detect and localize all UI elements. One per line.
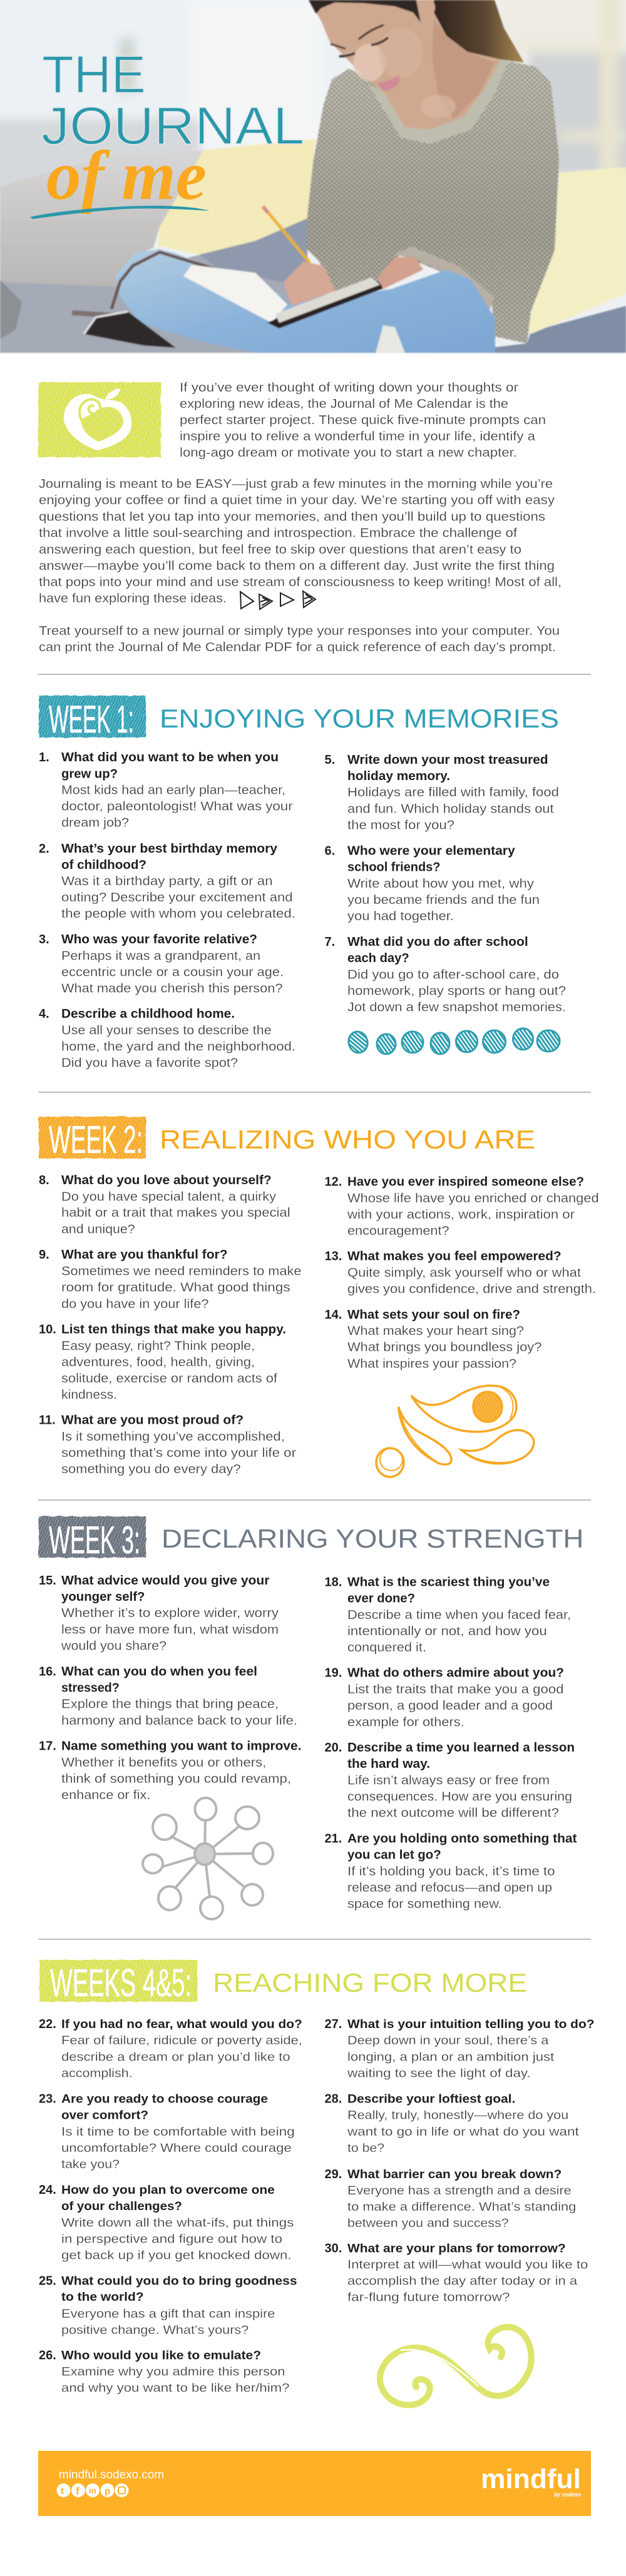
mindful logo: by sodexo [554,2492,581,2498]
question 14: What sets your soul on fire? [347,1308,520,1322]
question 23: take you? [61,2158,120,2171]
question 3: 3. [39,933,49,946]
question 6 [324,844,540,923]
icon: row of teal scribble balls [346,1028,560,1055]
question 11: Is it something you’ve accomplished, [61,1430,285,1444]
question 30 [324,2241,588,2304]
question 20 [324,1741,575,1820]
intro paragraph 1: perfect starter project. These quick five-minute prompts can [180,413,546,427]
question 17: think of something you could revamp, [61,1772,291,1786]
question 5: the most for you? [347,818,454,832]
question 10: adventures, food, health, giving, [61,1356,255,1369]
intro paragraph 1: long-ago dream or motivate you to start a new chapter. [180,446,517,460]
question 3: Perhaps it was a grandparent, an [61,950,260,963]
heading: week 1 [39,696,559,741]
question 24: 24. [39,2183,56,2197]
question 2: of childhood? [61,858,146,872]
jeans [116,249,495,353]
question 6: Write about how you met, why [347,877,534,891]
sweater [305,59,559,343]
question 1: doctor, paleontologist! What was your [61,800,293,814]
question 24: Write down all the what-ifs, put things [61,2216,294,2229]
question 19: person, a good leader and a good [347,1699,553,1713]
title: THE [42,45,146,104]
question 11: 11. [39,1414,56,1427]
question 8: 8. [39,1174,49,1187]
title: JOURNAL [41,96,304,155]
question 21: space for something new. [347,1897,502,1911]
question 2 [39,842,295,921]
question 20: consequences. How are you ensuring [347,1790,572,1803]
question 15: younger self? [61,1590,145,1604]
question 5: Write down your most treasured [347,753,548,767]
question 4: Use all your senses to describe the [61,1023,272,1037]
question 7: 7. [324,935,335,949]
question 15: What advice would you give your [61,1574,270,1588]
question 20: the next outcome will be different? [347,1806,559,1820]
icon: orange paisley doodle [376,1386,534,1477]
question 13 [324,1250,596,1296]
question 18: 18. [324,1575,342,1589]
hair [434,0,524,63]
question 2: the people with whom you celebrated. [61,907,295,921]
question 26: and why you want to be like her/him? [61,2381,290,2395]
heading: week 2: REALIZING WHO YOU ARE [160,1125,535,1154]
intro paragraph 1: exploring new ideas, the Journal of Me Calendar is the [180,397,508,411]
question 25: Everyone has a gift that can inspire [61,2307,275,2321]
question 30: 30. [324,2241,342,2255]
question 3 [39,933,284,996]
question 5: and fun. Which holiday stands out [347,802,554,816]
intro paragraph 3 [39,624,560,654]
question 10 [39,1323,286,1402]
question 30: far-flung future tomorrow? [347,2290,510,2304]
heading: weeks 4 and 5: WEEKS 4&5: [50,1962,192,2005]
pencil [264,208,310,263]
question 22: accomplish. [61,2067,133,2081]
question 23 [39,2092,295,2171]
question 15: 15. [39,1574,56,1588]
question 3: What made you cherish this person? [61,982,283,996]
question 9: do you have in your life? [61,1297,209,1311]
question 22: describe a dream or plan you’d like to [61,2051,290,2064]
pillows [0,150,203,287]
hero photo: girl writing in journal on a bed [0,0,626,353]
question 25: to the world? [61,2290,144,2304]
question 12: encouragement? [347,1224,449,1238]
question 14: 14. [324,1308,342,1322]
question 26: Examine why you admire this person [61,2365,285,2379]
question 21: Are you holding onto something that [347,1832,577,1846]
question 12 [324,1175,599,1238]
icon: gray network doodle [143,1798,273,1919]
question 20: the hard way. [347,1757,430,1771]
question 18: conquered it. [347,1641,426,1655]
question 1: 1. [39,751,49,764]
question 27 [324,2017,595,2081]
question 5: 5. [324,753,335,767]
question 8: habit or a trait that makes you special [61,1206,290,1220]
question 19 [324,1666,564,1730]
question 7: each day? [347,951,409,965]
question 2: Was it a birthday party, a gift or an [61,875,273,888]
question 6: Who were your elementary [347,844,516,858]
question 21: release and refocus—and open up [347,1881,552,1895]
question 22: If you had no fear, what would you do? [61,2017,302,2031]
question 13: Quite simply, ask yourself who or what [347,1266,581,1280]
question 5: Holidays are filled with family, food [347,786,559,799]
question 2: What’s your best birthday memory [61,842,278,856]
question 17: Whether it benefits you or others, [61,1756,266,1770]
question 20: Life isn’t always easy or free from [347,1773,550,1787]
question 10: solitude, exercise or random acts of [61,1372,277,1386]
intro paragraph 2: answering each question, but feel free to skip over questions that aren’t easy to [39,543,521,557]
question 28 [324,2092,579,2155]
question 20: Describe a time you learned a lesson [347,1741,575,1755]
heading: week 3: DECLARING YOUR STRENGTH [162,1524,583,1553]
intro paragraph 2: have fun exploring these ideas. [39,592,227,606]
question 2: outing? Describe your excitement and [61,891,293,905]
question 24 [39,2183,294,2262]
question 10: Easy peasy, right? Think people, [61,1339,255,1353]
question 25: positive change. What’s yours? [61,2323,249,2337]
question 26: 26. [39,2349,56,2363]
question 15: Whether it’s to explore wider, worry [61,1606,279,1620]
question 3: eccentric uncle or a cousin your age. [61,966,284,980]
heading: week 2 [39,1117,535,1162]
intro paragraph 1: inspire you to relive a wonderful time in your life, identify a [180,430,536,444]
title: of me [46,137,207,215]
question 23: Are you ready to choose courage [61,2092,268,2106]
question 22: Fear of failure, ridicule or poverty aside, [61,2034,302,2047]
question 7: Jot down a few snapshot memories. [347,1001,566,1015]
question 21: you can let go? [347,1848,441,1862]
question 16: harmony and balance back to your life. [61,1714,297,1728]
question 24: How do you plan to overcome one [61,2183,275,2197]
question 27: waiting to see the light of day. [347,2067,531,2081]
question 10: 10. [39,1323,56,1337]
question 10: List ten things that make you happy. [61,1323,286,1337]
question 17: enhance or fix. [61,1788,150,1802]
question 13: gives you confidence, drive and strength. [347,1282,596,1296]
question 8: What do you love about yourself? [61,1174,272,1187]
question 29: 29. [324,2168,342,2181]
icon: lime swirl [380,2327,531,2405]
hands [284,261,336,306]
neckband [367,59,509,144]
bed [0,216,388,353]
question 4: Describe a childhood home. [61,1007,235,1021]
heading: week 3 [39,1516,583,1562]
question 27: Deep down in your soul, there’s a [347,2034,548,2047]
question 7 [324,935,566,1015]
heading: week 1: ENJOYING YOUR MEMORIES [160,704,559,733]
question 7: Did you go to after-school care, do [347,968,559,982]
question 11 [39,1414,296,1476]
question 12: with your actions, work, inspiration or [347,1208,575,1222]
question 6: you became friends and the fun [347,893,540,907]
question 5 [324,753,559,832]
question 16: stressed? [61,1681,120,1695]
intro paragraph 3: can print the Journal of Me Calendar PDF for a quick reference of each day’s prompt. [39,641,556,654]
social icons: in [89,2486,96,2495]
question 18: Describe a time when you faced fear, [347,1608,571,1622]
question 18: intentionally or not, and how you [347,1625,547,1638]
question 16 [39,1665,297,1728]
social icons [56,2483,129,2497]
question 11: What are you most proud of? [61,1414,244,1427]
question 20: 20. [324,1741,342,1755]
question 19: example for others. [347,1716,464,1730]
question 4: Did you have a favorite spot? [61,1056,238,1070]
question 29 [324,2168,576,2230]
question 28: want to go in life or what do you want [347,2125,579,2139]
book [183,265,287,323]
intro paragraph 2: that involve a little soul-searching and introspection. Embrace the challenge of [39,527,517,540]
intro paragraph 2: enjoying your coffee or find a quiet time in your day. We’re starting you off with easy [39,494,555,507]
question 12: Whose life have you enriched or changed [347,1192,599,1205]
question 11: something that’s come into your life or [61,1446,296,1460]
question 16: What can you do when you feel [61,1665,257,1679]
question 1: Most kids had an early plan—teacher, [61,784,285,798]
question 18: ever done? [347,1591,415,1605]
question 13: 13. [324,1250,342,1264]
social icons: t [61,2486,64,2497]
heading: week 1: WEEK 1: [49,698,134,741]
question 9 [39,1248,302,1311]
intro paragraph 2: answer—maybe you’ll come back to them on a different day. Just write the first thing [39,559,555,573]
icon: sketched arrows [240,591,316,609]
question 28: 28. [324,2092,342,2106]
question 22 [39,2017,302,2081]
question 9: room for gratitude. What good things [61,1280,290,1294]
question 8 [39,1174,290,1236]
question 26 [39,2349,290,2395]
question 30: What are your plans for tomorrow? [347,2241,566,2255]
question 9: 9. [39,1248,49,1262]
question 11: something you do every day? [61,1463,241,1476]
question 21: 21. [324,1832,342,1846]
intro: apple icon block [38,382,161,457]
question 29: What barrier can you break down? [347,2168,562,2181]
heading: week 2: WEEK 2: [49,1118,143,1162]
question 23: Is it time to be comfortable with being [61,2125,295,2139]
heading: week 3: WEEK 3: [49,1519,140,1562]
question 24: of your challenges? [61,2199,182,2213]
question 17: 17. [39,1740,56,1753]
question 28: Really, truly, honestly—where do you [347,2108,568,2122]
intro paragraph 1 [180,381,546,460]
question 19: What do others admire about you? [347,1666,564,1680]
question 9: Sometimes we need reminders to make [61,1265,302,1279]
question 25: What could you do to bring goodness [61,2274,297,2288]
question 19: List the traits that make you a good [347,1683,563,1696]
question 19: 19. [324,1666,342,1680]
question 16: Explore the things that bring peace, [61,1698,279,1711]
question 7: What did you do after school [347,935,528,949]
question 5: holiday memory. [347,769,450,783]
question 14: What makes your heart sing? [347,1324,524,1338]
intro paragraph 1: If you’ve ever thought of writing down your thoughts or [180,381,518,395]
question 27: 27. [324,2017,342,2031]
question 8: and unique? [61,1222,135,1236]
question 1: grew up? [61,767,118,781]
question 18: What is the scariest thing you’ve [347,1575,550,1589]
question 23: over comfort? [61,2108,148,2122]
question 4: 4. [39,1007,49,1021]
question 3: Who was your favorite relative? [61,933,257,946]
question 4: home, the yard and the neighborhood. [61,1040,295,1053]
footer url: mindful.sodexo.com [59,2468,164,2482]
question 28: Describe your loftiest goal. [347,2092,515,2106]
question 16: 16. [39,1665,56,1679]
heading: weeks 4 and 5: REACHING FOR MORE [213,1968,527,1997]
question 18 [324,1575,571,1655]
question 6: school friends? [347,860,440,874]
question 12: 12. [324,1175,342,1189]
intro paragraph 2: that pops into your mind and use stream of consciousness to keep writing! Most of all, [39,576,562,589]
social icons: p [105,2486,110,2497]
shoe [84,312,176,348]
social icons: f [76,2485,80,2497]
question 15 [39,1574,279,1653]
question 14 [324,1308,541,1371]
eyes, lips [371,38,388,45]
question 4 [39,1007,295,1070]
intro paragraph 2: Journaling is meant to be EASY—just grab a few minutes in the morning while you’re [39,477,553,491]
question 14: What inspires your passion? [347,1357,516,1371]
question 29: Everyone has a strength and a desire [347,2184,572,2198]
question 14: What brings you boundless joy? [347,1341,541,1354]
question 6: 6. [324,844,335,858]
heading: weeks 4 and 5 [39,1960,527,2005]
question 30: accomplish the day after today or in a [347,2274,577,2288]
question 9: What are you thankful for? [61,1248,228,1262]
question 25: 25. [39,2274,56,2288]
question 28: to be? [347,2141,384,2155]
question 27: longing, a plan or an ambition just [347,2051,555,2064]
mindful logo: mindful [481,2463,581,2495]
question 26: Who would you like to emulate? [61,2349,261,2363]
question 24: get back up if you get knocked down. [61,2248,292,2262]
neck and face [309,0,501,129]
question 29: between you and success? [347,2216,509,2230]
question 13: What makes you feel empowered? [347,1250,562,1264]
question 1: What did you want to be when you [61,751,279,764]
intro paragraph 2: questions that let you tap into your memories, and then you’ll build up to questions [39,510,545,524]
question 23: 23. [39,2092,56,2106]
question 15: less or have more fun, what wisdom [61,1623,279,1636]
title [30,45,304,219]
intro paragraph 3: Treat yourself to a new journal or simply type your responses into your computer. You [39,624,560,638]
phone [376,325,405,353]
question 12: Have you ever inspired someone else? [347,1175,584,1189]
question 27: What is your intuition telling you to do? [347,2017,595,2031]
question 17 [39,1740,302,1802]
footer bar [38,2451,591,2516]
question 1 [39,751,293,830]
strap [111,252,219,309]
question 22: 22. [39,2017,56,2031]
question 29: to make a difference. What’s standing [347,2200,576,2214]
question 21: If it’s holding you back, it’s time to [347,1865,555,1879]
question 25 [39,2274,297,2337]
intro paragraph 2 [39,477,562,606]
question 15: would you share? [61,1639,167,1653]
question 21 [324,1832,577,1911]
question 10: kindness. [61,1388,117,1402]
question 24: in perspective and figure out how to [61,2232,282,2246]
question 8: Do you have special talent, a quirky [61,1190,276,1204]
question 6: you had together. [347,910,454,923]
question 17: Name something you want to improve. [61,1740,302,1753]
question 7: homework, play sports or hang out? [347,985,566,998]
question 30: Interpret at will—what would you like to [347,2258,588,2271]
question 23: uncomfortable? Where could courage [61,2141,292,2155]
question 1: dream job? [61,816,129,830]
question 2: 2. [39,842,49,856]
